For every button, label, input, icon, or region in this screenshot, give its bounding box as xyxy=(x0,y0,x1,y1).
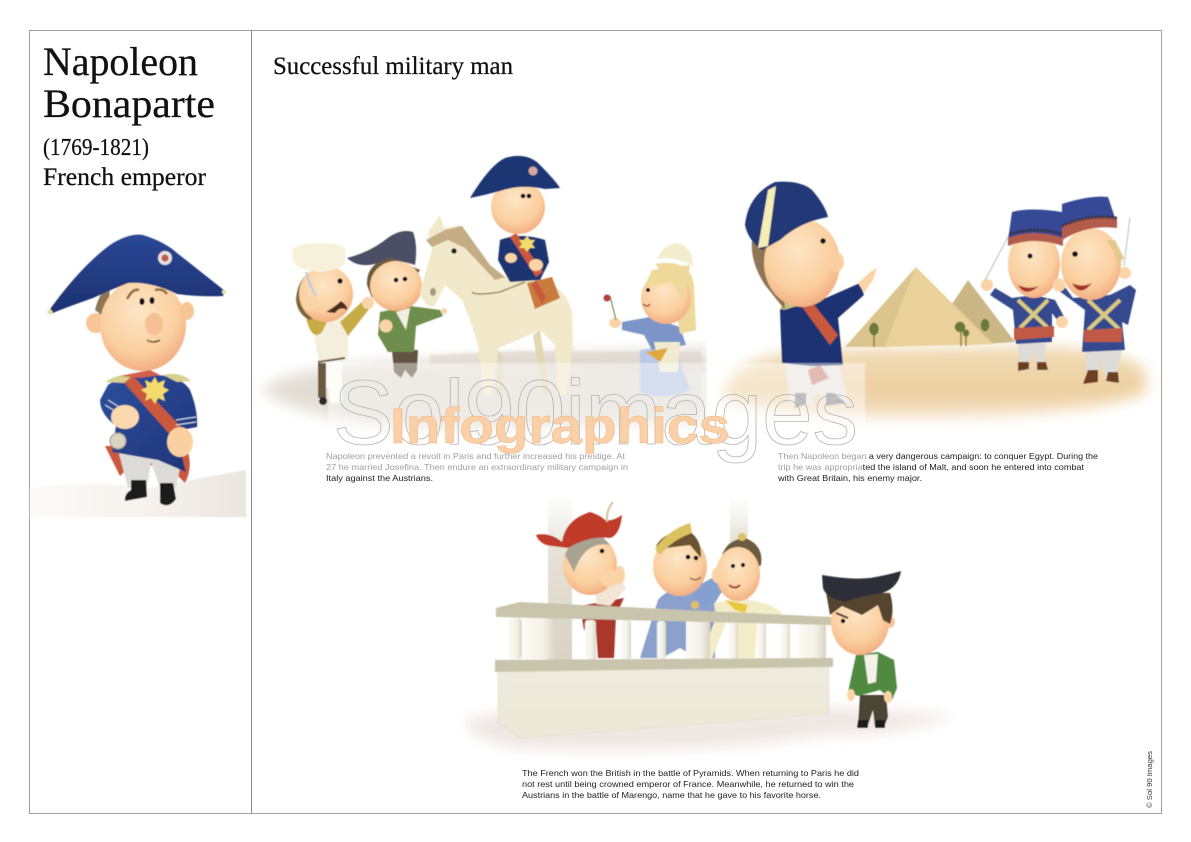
sidebar divider xyxy=(250,30,252,814)
title block xyxy=(43,39,215,191)
balustrade xyxy=(495,602,833,738)
figure: soldier right xyxy=(1052,197,1136,384)
panel: scene 1, Paris and Italy xyxy=(262,156,707,438)
text block: scene 2 caption: Then Napoleon began a very dangerous campaign: to conquer Egypt. During the xyxy=(778,451,1098,461)
figure: man in green coat xyxy=(347,231,447,378)
figure: Napoleon on horseback xyxy=(420,156,573,395)
text block: scene 2 caption: trip he was appropria ted the island of Malt, and soon he entered into combat xyxy=(778,462,1085,472)
text block: scene 3 caption: not rest until being crowned emperor of France. Meanwhile, he returned to win the xyxy=(522,779,854,789)
text block: scene 3 caption: The French won the British in the battle of Pyramids. When returning to Paris he did xyxy=(522,768,859,778)
text block: scene 3 caption: Austrians in the battle of Marengo, name that he gave to his favorite horse. xyxy=(522,790,821,800)
figure: man with turban xyxy=(292,243,374,405)
credit: Sol 90 Images: © Sol 90 Images xyxy=(1146,750,1154,808)
figure: Napoleon body xyxy=(100,370,197,505)
panel: scene 2, Egypt campaign xyxy=(715,182,1146,427)
text block: scene 1 caption xyxy=(326,451,628,483)
floor shadow xyxy=(465,708,955,750)
ground shadow xyxy=(30,470,246,517)
watermark veil xyxy=(715,363,865,427)
ground: desert sand xyxy=(724,346,1146,418)
icon: palm trees xyxy=(870,319,989,347)
subtitle: dates and role: (1769-1821) xyxy=(43,135,149,161)
ground: paved square xyxy=(262,348,707,430)
text block: scene 2 caption: with Great Britain, his enemy major. xyxy=(777,473,922,483)
figure: empress xyxy=(700,533,782,658)
title: Napoleon Bonaparte: Bonaparte xyxy=(43,81,215,126)
text block: scene 2 caption xyxy=(777,451,1098,483)
title: Napoleon Bonaparte: Napoleon xyxy=(43,39,198,84)
watermark: Sol90images: Sol90images xyxy=(333,362,858,464)
figure: Napoleon pointing xyxy=(745,182,877,408)
subtitle: dates and role: French emperor xyxy=(43,164,207,191)
figure: Napoleon head xyxy=(86,279,194,371)
icon: pyramids xyxy=(845,267,1015,347)
figure: soldier left xyxy=(981,210,1068,371)
text block: scene 3 caption xyxy=(522,768,859,800)
columns xyxy=(548,490,748,660)
title: Napoleon Bonaparte xyxy=(43,39,215,126)
figure: crowned emperor xyxy=(640,523,725,658)
heading: Successful military man: Successful military man xyxy=(273,53,513,80)
figure: young officer in green xyxy=(822,571,901,728)
panel: scene 3, coronation balcony xyxy=(465,490,955,750)
text block: scene 1 caption: Italy against the Austrians. xyxy=(326,473,433,483)
figure: courtier with red hat xyxy=(536,502,626,658)
figure: woman with rose xyxy=(604,243,696,397)
watermark: Infographics: Infographics xyxy=(390,398,730,454)
icon: bicorne hat xyxy=(48,235,226,314)
panel: Napoleon portrait xyxy=(30,235,246,517)
text block: scene 1 caption: 27 he married Josefina. Then endure an extraordinary military campaign in xyxy=(326,462,628,472)
text block: scene 1 caption: Napoleon prevented a revolt in Paris and further increased his prestige. At xyxy=(326,451,626,461)
subtitle: dates and role xyxy=(43,135,207,191)
watermark veil xyxy=(328,363,707,438)
